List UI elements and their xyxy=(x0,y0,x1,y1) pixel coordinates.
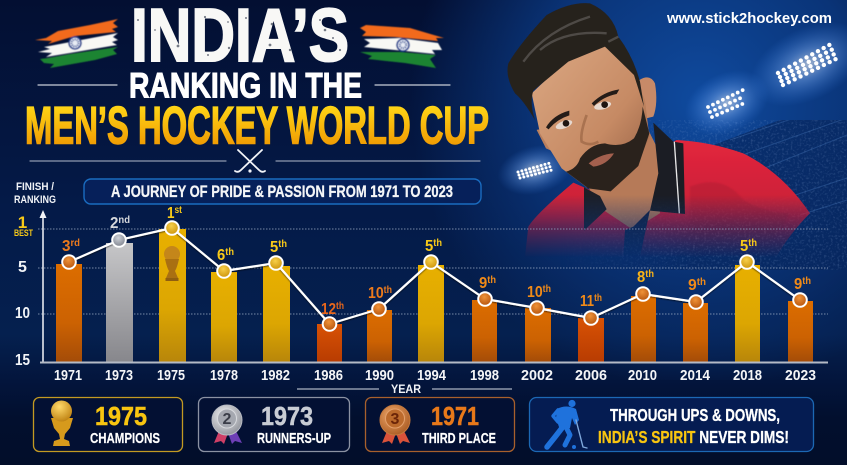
shirt shoulder shading xyxy=(690,182,788,216)
y axis labels: 10 xyxy=(15,305,30,322)
rank labels: th xyxy=(433,238,442,249)
x axis year labels xyxy=(54,367,816,384)
x axis year labels: 1994 xyxy=(417,367,447,384)
rank labels: 9 xyxy=(688,277,697,294)
left ear xyxy=(536,130,550,150)
hair xyxy=(507,3,644,120)
rank labels: th xyxy=(543,284,551,295)
rank labels: 5 xyxy=(740,238,749,255)
bars xyxy=(56,229,813,362)
subtitle banner xyxy=(84,179,481,204)
photo: hockey player portrait xyxy=(507,3,810,257)
rank labels: st xyxy=(174,205,183,216)
panel: 1973 runners-up: RUNNERS-UP xyxy=(257,431,331,447)
x axis year labels: 1978 xyxy=(210,367,238,384)
x axis year labels: 1998 xyxy=(470,367,499,384)
mouth xyxy=(589,153,614,167)
panel: spirit callout: THROUGH UPS & DOWNS, xyxy=(610,405,780,425)
beard xyxy=(566,107,649,191)
rank labels xyxy=(62,205,811,318)
rank labels: rd xyxy=(70,238,80,249)
icon: trophy on 1975 bar xyxy=(164,246,180,281)
icon: hockey player silhouette xyxy=(547,400,587,449)
panel: 1971 third place: THIRD PLACE xyxy=(422,431,496,447)
icon: bronze medal: 3 xyxy=(391,411,400,428)
right collar xyxy=(650,123,685,214)
grid lines xyxy=(38,229,828,314)
rank labels: th xyxy=(594,293,602,304)
rank labels: 11 xyxy=(580,293,597,310)
icon: gold trophy xyxy=(51,400,73,446)
rank labels: th xyxy=(697,277,706,288)
panel: spirit callout xyxy=(530,398,814,452)
x axis year labels: 1971 xyxy=(54,367,82,384)
face xyxy=(532,45,649,191)
x axis year labels: 2018 xyxy=(733,367,762,384)
y axis labels: 5 xyxy=(18,259,27,276)
icon: silver medal: 2 xyxy=(223,411,232,428)
eyebrows xyxy=(592,89,619,106)
rank labels: 9 xyxy=(479,275,488,292)
y axis title: RANKING xyxy=(14,194,56,206)
placket xyxy=(623,210,650,257)
panel: 1975 champions xyxy=(34,398,182,452)
panel: 1971 third place xyxy=(366,398,514,452)
rank labels: th xyxy=(336,301,344,312)
x axis year labels: 2006 xyxy=(575,367,607,384)
red shirt xyxy=(525,140,810,257)
rank labels: th xyxy=(278,239,287,250)
left collar xyxy=(584,187,607,231)
rank labels: 5 xyxy=(425,238,434,255)
eyes xyxy=(594,102,612,110)
y axis title xyxy=(14,181,56,206)
x axis year labels: 2023 xyxy=(785,367,816,384)
title line: RANKING IN THE: RANKING IN THE xyxy=(129,66,362,106)
panel: spirit callout: INDIA’S SPIRIT NEVER DIMS! xyxy=(598,427,789,447)
rank labels: th xyxy=(384,285,392,296)
x axis year labels: 1973 xyxy=(105,367,133,384)
x axis year labels: 1986 xyxy=(314,367,343,384)
flag: right xyxy=(360,25,444,68)
y axis title: FINISH / xyxy=(16,181,54,193)
rank labels: th xyxy=(748,238,757,249)
x axis year labels: 1975 xyxy=(157,367,185,384)
panel: 1975 champions: 1975 xyxy=(95,401,147,431)
title line: MEN'S HOCKEY WORLD CUP: MEN’S HOCKEY WORLD CUP xyxy=(25,96,489,156)
data points xyxy=(62,221,807,331)
y axis labels xyxy=(14,213,33,369)
website url: www.stick2hockey.com xyxy=(666,10,832,27)
x axis year labels: 1982 xyxy=(261,367,290,384)
neck xyxy=(587,127,660,230)
rank labels: th xyxy=(225,247,234,258)
x axis year labels: 2010 xyxy=(628,367,657,384)
panel: 1973 runners-up: 1973 xyxy=(261,401,313,431)
icon: silver medal xyxy=(212,405,242,444)
right ear xyxy=(639,77,656,118)
rank labels: th xyxy=(645,269,654,280)
rank labels: th xyxy=(802,276,811,287)
icon: crossed hockey sticks xyxy=(235,150,265,173)
rank labels: th xyxy=(487,275,496,286)
panel: 1971 third place: 1971 xyxy=(431,401,479,431)
x axis title: YEAR xyxy=(391,382,421,396)
x axis year labels: 1990 xyxy=(365,367,394,384)
rank labels: 10 xyxy=(368,285,386,302)
rank labels: 8 xyxy=(637,269,646,286)
rank labels: 6 xyxy=(217,247,226,264)
flag: left xyxy=(35,19,118,68)
chart: ranking by year xyxy=(14,205,828,384)
rank labels: 5 xyxy=(270,239,279,256)
icon: bronze medal xyxy=(380,405,410,444)
stadium floodlights xyxy=(492,4,847,202)
y axis labels: BEST xyxy=(14,228,33,238)
nose shadow xyxy=(581,115,598,144)
y axis labels: 15 xyxy=(15,352,30,369)
stadium stands xyxy=(612,120,847,270)
rank labels: 3 xyxy=(62,238,71,255)
rank labels: 1 xyxy=(167,205,176,222)
panel: 1975 champions: CHAMPIONS xyxy=(90,431,160,447)
y axis labels: 1 xyxy=(18,213,27,232)
rank labels: 2 xyxy=(110,215,119,232)
rank labels: 12 xyxy=(321,301,339,318)
subtitle banner: A JOURNEY OF PRIDE & PASSION FROM 1971 TO 2023 xyxy=(111,183,453,201)
panel: 1973 runners-up xyxy=(198,398,350,452)
hair highlights xyxy=(523,17,618,62)
x axis year labels: 2014 xyxy=(680,367,711,384)
ashoka chakra xyxy=(397,39,409,51)
title xyxy=(25,0,489,156)
axes xyxy=(40,210,828,362)
rank labels: 9 xyxy=(794,276,803,293)
trend line xyxy=(69,228,800,324)
ashoka chakra xyxy=(69,37,81,49)
x axis year labels: 2002 xyxy=(521,367,553,384)
rank labels: nd xyxy=(118,215,130,226)
rank labels: 10 xyxy=(527,284,545,301)
